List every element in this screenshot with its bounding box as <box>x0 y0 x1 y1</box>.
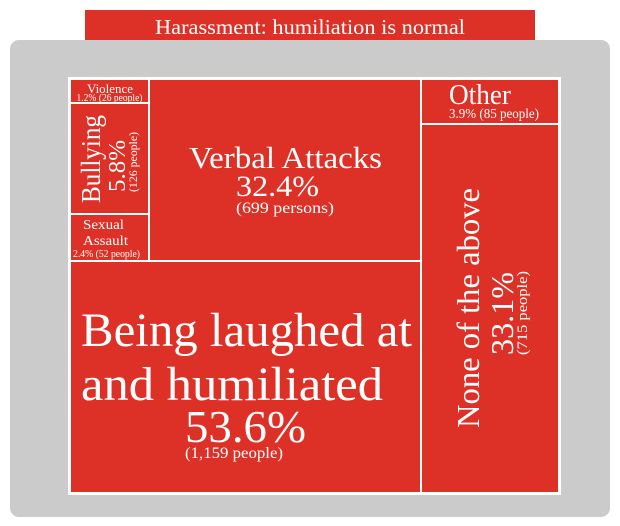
cell: none of the above <box>422 125 558 492</box>
cell: bullying: Bullying <box>76 115 106 203</box>
cell: violence <box>71 80 148 104</box>
cell: none of the above: 33.1% <box>484 272 520 355</box>
cell: being laughed at and humiliated <box>71 262 420 492</box>
cell: violence: 1.2% (26 people) <box>76 93 142 104</box>
cell: other <box>422 80 558 123</box>
cell: other: 3.9% (85 people) <box>449 106 539 121</box>
cell: being laughed at and humiliated: Being laughed at <box>81 304 413 357</box>
cell: verbal attacks: (699 persons) <box>236 200 334 217</box>
cell: violence: Violence <box>87 81 133 96</box>
cell: verbal attacks: Verbal Attacks <box>189 140 382 175</box>
cell: verbal attacks <box>150 80 420 260</box>
cell: sexual assault: 2.4% (52 people) <box>73 249 140 260</box>
cell: sexual assault <box>71 215 148 260</box>
title banner <box>85 10 535 40</box>
cell: bullying: (126 people) <box>126 132 140 192</box>
cell: verbal attacks: 32.4% <box>236 170 319 203</box>
cell: none of the above: None of the above <box>450 188 486 428</box>
cell: bullying <box>71 104 148 213</box>
cell: being laughed at and humiliated: and humiliated <box>81 358 383 411</box>
cell: sexual assault: Assault <box>83 234 128 249</box>
treemap frame <box>68 77 561 495</box>
cell: bullying: 5.8% <box>105 140 131 192</box>
cell: being laughed at and humiliated: (1,159 people) <box>185 445 283 462</box>
cell: sexual assault: Sexual <box>83 218 124 233</box>
cell: other: Other <box>449 80 512 111</box>
cell: being laughed at and humiliated: 53.6% <box>185 402 306 452</box>
title banner: Harassment: humiliation is normal <box>155 15 465 39</box>
cell: none of the above: (715 people) <box>515 271 531 355</box>
